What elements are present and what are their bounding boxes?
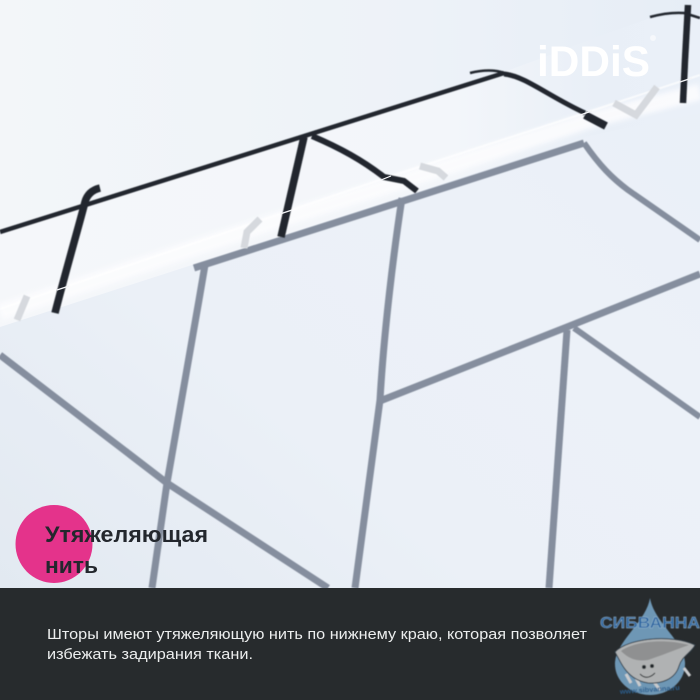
- text block: description: избежать задирания ткани.: [47, 647, 253, 663]
- heading: weighted thread: нить: [45, 553, 98, 578]
- black printed lines on the top fold: [0, 5, 700, 313]
- fold of fabric: [0, 15, 700, 327]
- website: www.sibvanna.ru: [619, 685, 680, 696]
- icon: bath feet: [626, 668, 690, 690]
- text block: description: Шторы имеют утяжеляющую нить по нижнему краю, которая позволяет: [47, 627, 587, 643]
- brand name: СИБВАННА: [600, 615, 700, 632]
- grey printed lines below the fold: [0, 143, 700, 588]
- pink accent circle: [16, 505, 92, 583]
- icon: water drop: [615, 598, 685, 695]
- stitch highlight: [0, 75, 700, 309]
- text block: description: [47, 627, 587, 663]
- heading: weighted thread: [45, 522, 208, 578]
- panel: dark caption band: [0, 588, 700, 700]
- bright roll along the fold: [0, 92, 700, 312]
- icon: bath tub: [615, 639, 695, 683]
- bath inner rim: [621, 641, 689, 661]
- heading: weighted thread: Утяжеляющая: [45, 522, 208, 547]
- logo: IDDIS: iDDiS: [537, 38, 650, 86]
- upper fabric layer: [0, 0, 700, 230]
- icon: bath face: [640, 664, 655, 677]
- white stitches crossing the black stripes: [57, 78, 692, 290]
- logo: Sibvanna bath and water drop: [600, 598, 700, 696]
- pale ghost marks showing through the fabric: [17, 87, 657, 320]
